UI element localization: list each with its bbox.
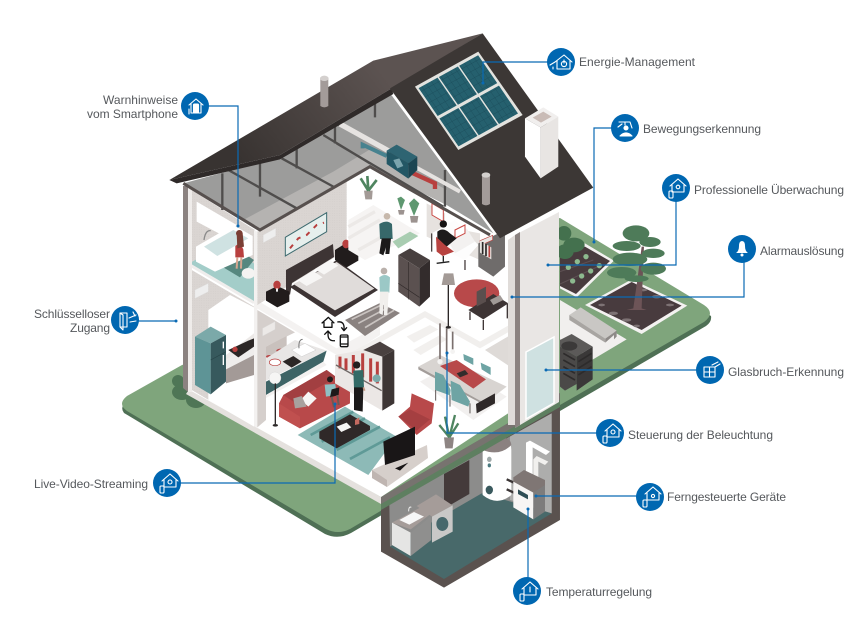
callout: Glasbruch-Erkennung: Glasbruch-Erkennung xyxy=(728,365,844,379)
hot water tank xyxy=(483,437,514,501)
office xyxy=(427,203,480,270)
icon: motion sensor xyxy=(618,122,632,136)
man in green sweater xyxy=(379,213,393,255)
bathroom xyxy=(188,188,255,303)
potted plant xyxy=(439,415,458,448)
woman standing xyxy=(379,268,390,315)
upper floor right rooms xyxy=(335,176,508,336)
callout: Bewegungserkennung: Bewegungserkennung xyxy=(643,122,761,136)
callout: Ferngesteuerte Geräte: Ferngesteuerte Geräte xyxy=(667,490,786,504)
callout: Warnhinweise vom Smartphone: vom Smartphone xyxy=(87,107,178,121)
bedroom rug xyxy=(345,303,400,336)
callout: Schlüsselloser Zugang: Schlüsselloser xyxy=(34,307,110,321)
callout: Glasbruch-Erkennung xyxy=(544,356,844,384)
post xyxy=(254,230,257,307)
chimney xyxy=(525,107,558,178)
icon: energy house xyxy=(550,55,572,69)
window xyxy=(526,337,554,419)
tv and stand xyxy=(372,427,428,487)
smart home sync symbol xyxy=(322,317,348,347)
icon: video house xyxy=(160,474,178,493)
plants xyxy=(361,176,419,223)
callout: Warnhinweise vom Smartphone xyxy=(87,92,240,228)
callout: Schlüsselloser Zugang: Zugang xyxy=(70,321,110,335)
callout: Energie-Management xyxy=(482,48,696,84)
callout: Steuerung der Beleuchtung xyxy=(446,352,773,447)
living and dining room right xyxy=(335,311,515,487)
wall picture xyxy=(285,213,327,256)
upper floor rooms xyxy=(188,182,378,317)
callout: Alarmauslösung: Alarmauslösung xyxy=(760,244,844,258)
woman in bathroom xyxy=(235,230,244,269)
callout: Temperaturregelung xyxy=(513,508,652,605)
callout: Live-Video-Streaming xyxy=(34,402,336,497)
boiler xyxy=(513,441,550,519)
right column wall xyxy=(183,186,559,428)
air conditioning unit xyxy=(560,334,593,391)
upper plate xyxy=(347,311,515,359)
icon: bell xyxy=(736,241,748,256)
left roof surface xyxy=(169,33,483,180)
ventilation duct xyxy=(340,124,460,192)
coffee table xyxy=(319,414,370,448)
sofa xyxy=(279,370,350,428)
dining area xyxy=(418,323,507,420)
red rug and desk xyxy=(454,279,508,330)
garden beds and tree xyxy=(556,225,687,391)
chimney vent right xyxy=(482,172,490,205)
icon: lighting house xyxy=(603,424,621,443)
callout: Live-Video-Streaming: Live-Video-Streaming xyxy=(34,477,148,491)
fridge xyxy=(195,327,226,394)
basement xyxy=(381,407,560,588)
floor lamp xyxy=(442,273,455,329)
wall vent xyxy=(195,283,208,298)
bench xyxy=(569,307,617,343)
grey back wall xyxy=(485,333,515,370)
callout: Ferngesteuerte Geräte xyxy=(534,483,786,511)
callout: Steuerung der Beleuchtung: Steuerung der Beleuchtung xyxy=(628,428,773,442)
kitchen left wall xyxy=(189,268,254,427)
icon: surveillance house xyxy=(669,179,686,198)
nightstands xyxy=(266,281,289,307)
callout: Professionelle Überwachung: Professionelle Überwachung xyxy=(694,183,844,197)
floor xyxy=(183,190,530,497)
house floor slab xyxy=(183,190,560,510)
vegetable bed xyxy=(556,226,614,297)
callout: Alarmauslösung xyxy=(510,235,844,298)
ground floor rooms xyxy=(189,268,397,475)
callout: Temperaturregelung: Temperaturregelung xyxy=(546,585,652,599)
basement floor xyxy=(390,493,552,579)
icon: broken window xyxy=(704,362,720,377)
wall vent xyxy=(263,228,276,243)
attic glazing xyxy=(183,94,493,235)
person on sofa xyxy=(325,376,339,407)
hedge xyxy=(556,226,585,259)
kitchen island xyxy=(266,336,327,398)
bookshelf office xyxy=(478,230,505,277)
sink and washer xyxy=(392,494,453,556)
kitchen counter xyxy=(226,333,254,383)
tree bed xyxy=(585,279,687,334)
icon: temperature house xyxy=(520,582,538,601)
woman at bookcase xyxy=(353,361,365,412)
bed xyxy=(286,244,378,317)
callout: Schlüsselloser Zugang xyxy=(34,306,178,335)
bookcase xyxy=(335,342,394,411)
standing lamp xyxy=(269,372,281,427)
callout: Professionelle Überwachung xyxy=(546,174,844,266)
bedroom wall xyxy=(257,182,347,305)
callout: Energie-Management: Energie-Management xyxy=(579,55,696,69)
door xyxy=(444,460,469,509)
wardrobe xyxy=(398,248,430,307)
faint stairs xyxy=(407,325,447,355)
armchair xyxy=(398,393,434,435)
paved area xyxy=(560,300,627,360)
icon: remote devices house xyxy=(643,487,661,507)
garden lawn xyxy=(122,218,711,537)
icon: smartphone alert house xyxy=(189,99,203,114)
roof xyxy=(169,33,593,238)
right roof surface xyxy=(390,33,593,238)
chimney vent left xyxy=(320,76,329,107)
bushes xyxy=(172,375,206,408)
faint rug xyxy=(348,205,420,260)
callout: Bewegungserkennung xyxy=(592,114,761,244)
upper floor edge xyxy=(254,298,380,357)
icon: keyless door xyxy=(120,312,136,330)
callout: Warnhinweise vom Smartphone: Warnhinweise xyxy=(103,93,178,107)
divider wall xyxy=(254,300,295,428)
tree xyxy=(607,225,666,310)
basement walls xyxy=(389,413,552,547)
solar panels xyxy=(415,52,523,150)
living room rug xyxy=(298,407,397,475)
bedroom nightstand right xyxy=(335,240,358,267)
